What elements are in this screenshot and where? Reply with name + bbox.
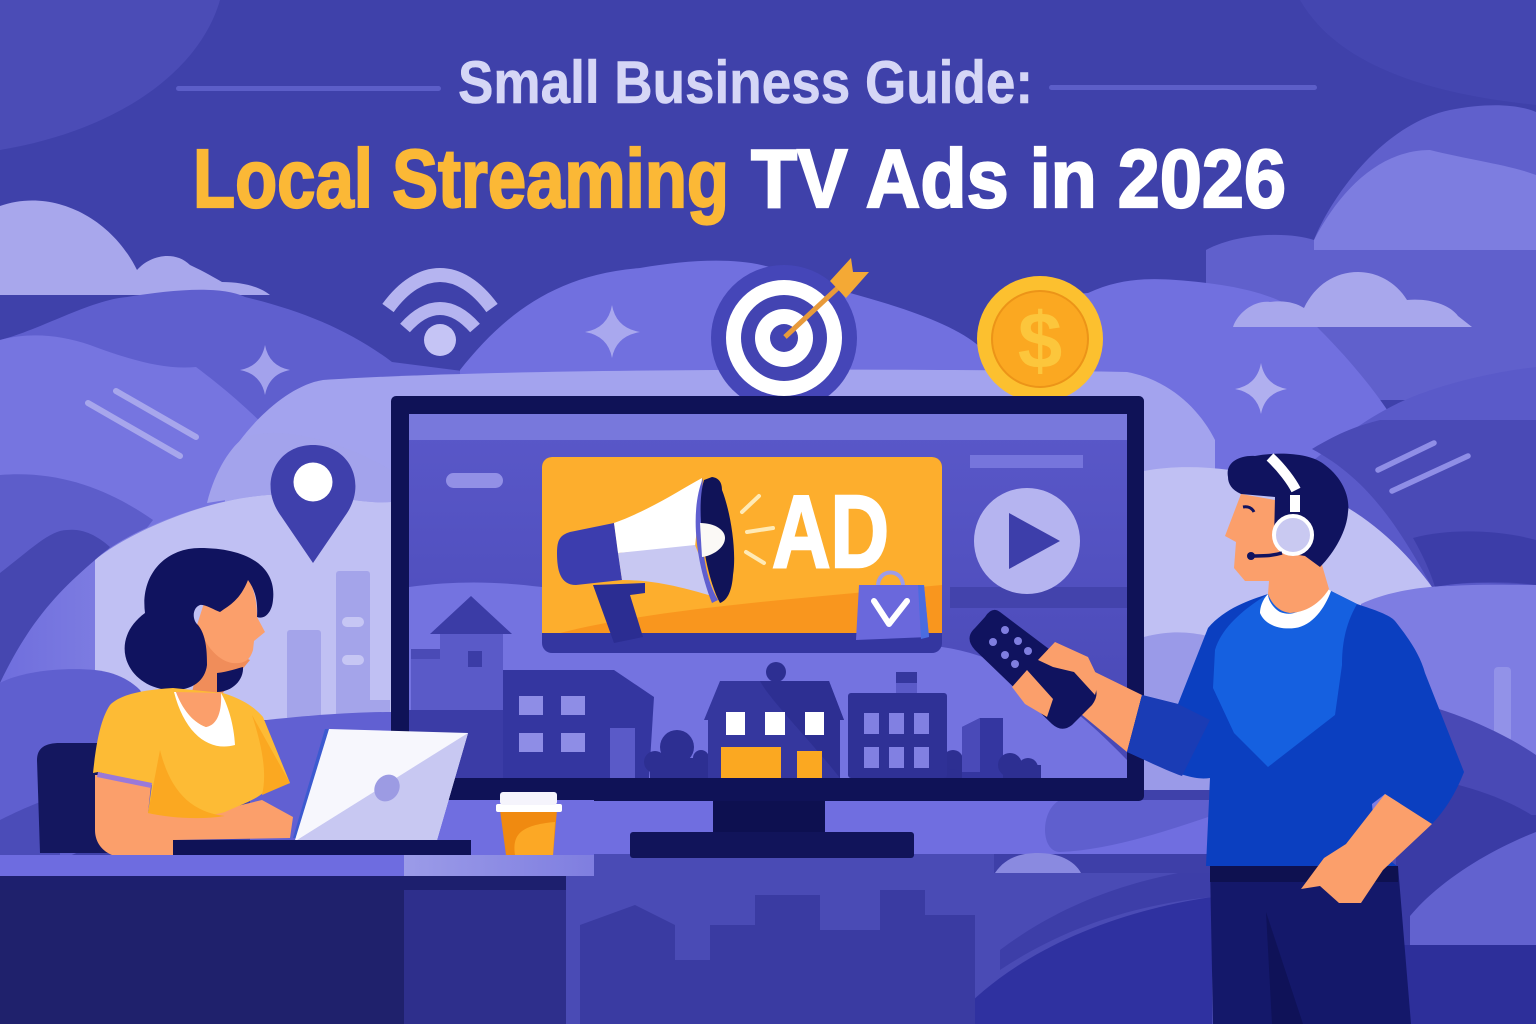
laptop	[173, 729, 471, 855]
icon: dollar coin	[977, 276, 1103, 402]
title: main heading	[193, 132, 1286, 225]
title line left	[176, 86, 441, 91]
collar	[174, 692, 235, 747]
tv stand	[630, 798, 914, 858]
arm	[95, 775, 293, 855]
title: main heading: Local Streaming	[193, 132, 729, 225]
face	[197, 578, 265, 663]
chair	[37, 743, 110, 853]
neck	[190, 640, 250, 700]
desk	[0, 800, 594, 1024]
megaphone sound lines	[742, 496, 773, 563]
hair	[125, 548, 273, 690]
face and neck	[1225, 494, 1329, 613]
sweater	[1127, 591, 1464, 866]
collar	[1260, 586, 1331, 628]
icon: wifi	[388, 275, 492, 356]
title: subtitle: Small Business Guide:	[458, 49, 1033, 116]
light panel left	[95, 494, 391, 720]
sleeve band	[97, 772, 152, 788]
forearm	[1081, 672, 1142, 752]
icon: megaphone	[557, 477, 734, 643]
speed lines right	[1378, 443, 1468, 491]
eye	[1243, 507, 1254, 512]
cloud right	[1233, 272, 1472, 327]
arm to hip	[1301, 794, 1432, 903]
local town on screen	[409, 596, 1041, 778]
icon: target with arrow	[711, 258, 869, 411]
hair	[1228, 454, 1348, 567]
speed lines left	[88, 391, 196, 456]
lower left hills	[0, 669, 391, 860]
icon: play button	[974, 488, 1080, 594]
icon: shopping bag	[856, 572, 929, 640]
trees	[644, 730, 970, 778]
sweater front panel	[1213, 591, 1357, 767]
television	[391, 396, 1144, 858]
icon: dollar coin: $	[1018, 296, 1062, 385]
remote control	[970, 610, 1099, 729]
icon: location pin	[271, 445, 355, 563]
foreground skyline	[580, 890, 975, 1024]
floor behind	[566, 800, 1536, 1024]
shirt	[93, 688, 290, 817]
hill left of television	[0, 494, 391, 720]
woman at desk	[37, 548, 293, 855]
right background	[1144, 420, 1536, 860]
cloud left	[0, 200, 270, 295]
coffee cup	[496, 792, 562, 855]
ad banner	[542, 457, 942, 653]
icon: sparkle right	[1235, 363, 1287, 414]
legs	[1210, 866, 1411, 1024]
tv frame	[391, 396, 1144, 801]
title line right	[1049, 85, 1317, 90]
icon: sparkle left	[240, 345, 290, 395]
background skyline left	[287, 571, 390, 721]
man with remote	[970, 454, 1464, 1024]
background hills	[0, 261, 1536, 720]
tv screen	[409, 414, 1127, 778]
screen ui bars	[446, 455, 1083, 488]
hand on remote	[1038, 642, 1099, 695]
icon: sparkle centre	[585, 305, 640, 358]
title: main heading: TV Ads in 2026	[751, 132, 1286, 225]
back hair lock	[217, 667, 243, 692]
hill above pin	[207, 433, 391, 503]
headset	[1247, 457, 1312, 560]
ad label: AD	[772, 474, 889, 589]
sleeve cuff	[1127, 695, 1210, 776]
light hump behind television	[225, 370, 1215, 640]
